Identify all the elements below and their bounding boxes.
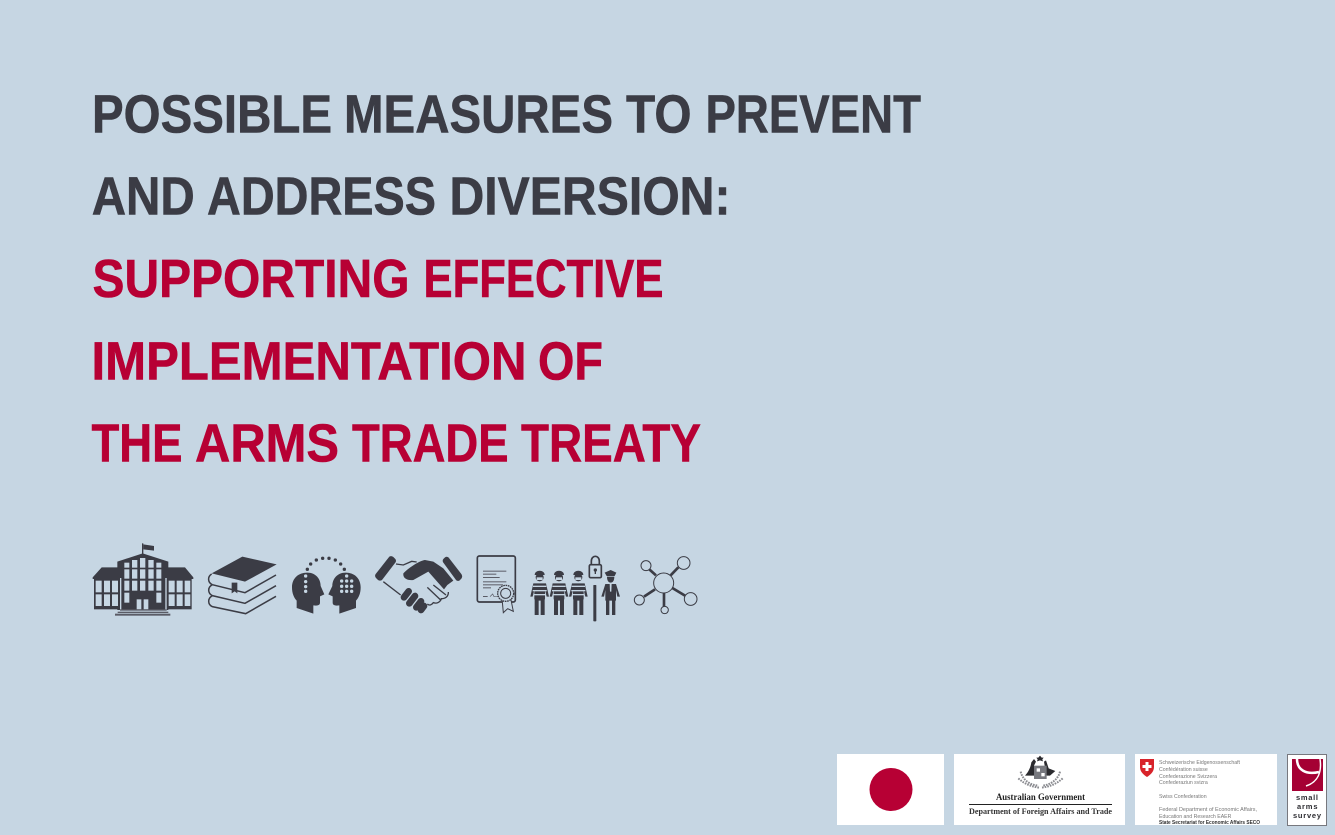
subtitle line 2: IMPLEMENTATION — [92, 331, 526, 391]
title line 1: PREVENT — [706, 84, 921, 144]
title line 1: POSSIBLE — [92, 84, 332, 144]
icon: network nodes — [634, 557, 697, 614]
logo: Small Arms Survey: small — [1296, 793, 1318, 802]
logo: Swiss Confederation — [1135, 754, 1277, 826]
subtitle line 1: SUPPORTING — [92, 249, 410, 309]
title line 1 — [92, 84, 921, 144]
subtitle line 3: TRADE — [352, 414, 508, 474]
icon: school building — [93, 543, 193, 616]
subtitle line 3: ARMS — [195, 414, 339, 474]
logo: Swiss Confederation: Confederazione Svizzera — [1159, 774, 1217, 780]
subtitle line 2: OF — [538, 331, 603, 391]
logo: Small Arms Survey: survey — [1293, 811, 1322, 820]
subtitle line 1: EFFECTIVE — [424, 249, 664, 309]
icon: Swiss shield — [1140, 759, 1154, 777]
logo: Swiss Confederation: Federal Department of Economic Affairs, — [1159, 807, 1257, 813]
title — [92, 84, 921, 474]
icon: handshake — [375, 556, 462, 610]
icon: two heads sharing knowledge — [292, 557, 361, 614]
logo: Swiss Confederation: Education and Research EAER — [1159, 814, 1232, 820]
title line 1: MEASURES — [344, 84, 613, 144]
logo: Swiss Confederation: Confédération suisse — [1159, 767, 1208, 773]
title line 1: TO — [626, 84, 692, 144]
logo: Australian Government: Department of Foreign Affairs and Trade — [969, 807, 1112, 816]
title line 2: DIVERSION: — [450, 167, 730, 227]
subtitle line 3 — [92, 414, 701, 474]
logo: Swiss Confederation: Swiss Confederation — [1159, 794, 1207, 800]
logo: Small Arms Survey: arms — [1297, 802, 1318, 811]
logo: Australian Government — [954, 754, 1125, 825]
logo: Swiss Confederation: Confederaziun svizra — [1159, 780, 1208, 786]
subtitle line 1 — [92, 249, 664, 309]
title line 2: AND — [92, 167, 195, 227]
icon: coat of arms — [1018, 756, 1063, 788]
icon: certificate — [477, 556, 515, 613]
icon: stack of books — [209, 557, 277, 614]
subtitle line 3: THE — [92, 414, 182, 474]
logo: Swiss Confederation: Schweizerische Eidgenossenschaft — [1159, 760, 1241, 766]
subtitle line 3: TREATY — [521, 414, 701, 474]
title line 2 — [92, 167, 730, 227]
logo: Australian Government: Australian Government — [996, 792, 1085, 802]
logo: Swiss Confederation: State Secretariat for Economic Affairs SECO — [1159, 820, 1260, 826]
title line 2: ADDRESS — [207, 167, 436, 227]
icon: prisoners, lock and guard — [530, 556, 620, 621]
logo: Small Arms Survey — [1288, 754, 1326, 826]
logo: Japan flag — [837, 754, 944, 825]
